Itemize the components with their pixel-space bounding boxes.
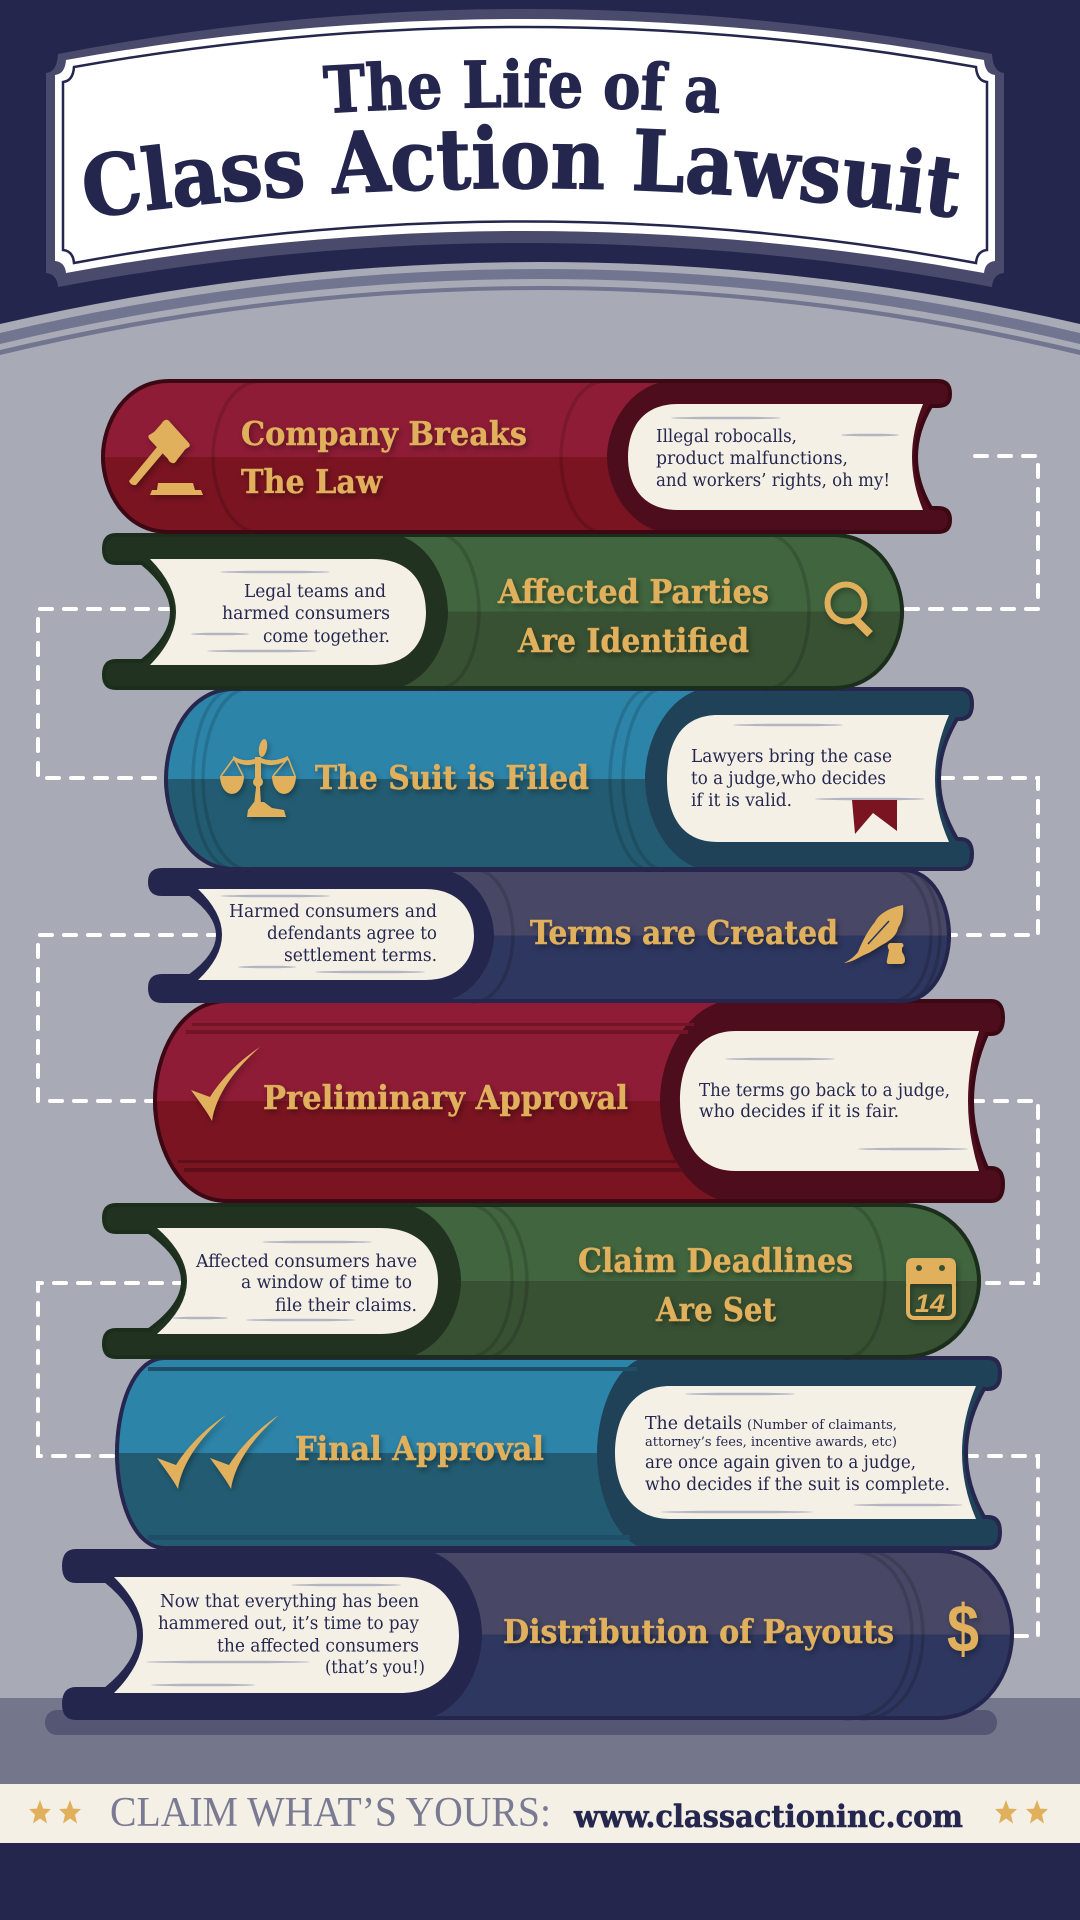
icon: magnifying glass [828,584,870,634]
heading: Final Approval [295,1429,544,1468]
heading: Are Set [655,1290,776,1329]
description: attorney’s fees, incentive awards, etc) [645,1435,897,1450]
grey wall with curved top [0,262,1080,1700]
description: who decides if the suit is complete. [645,1475,950,1495]
cover [104,535,902,688]
footer strip [0,1784,1080,1843]
curved band one [0,269,1080,344]
spine rings [437,534,809,689]
footer background [0,1784,1080,1843]
description [699,1081,950,1122]
description: (Number of claimants, [747,1418,897,1433]
pages [615,1386,976,1519]
outline [103,381,950,532]
cover [166,689,972,869]
pages [667,715,949,842]
book stack shadow [45,1710,997,1735]
book 6: Claim Deadlines Are Set [104,1203,981,1359]
cover [103,381,950,532]
icon: right stars [995,1800,1048,1824]
page scuffs [191,571,330,652]
spine [153,999,740,1203]
book 7: Final Approval [115,1356,1000,1550]
heading: Company Breaks [241,414,527,453]
heading [578,1241,853,1329]
description [222,582,390,647]
banner white plate [55,19,995,273]
description: a window of time to [241,1273,412,1293]
description: who decides if it is fair. [699,1102,899,1122]
cover [150,870,949,1001]
dashed connector path [38,456,1038,1636]
spine rings [193,688,665,870]
description: settlement terms. [284,946,437,966]
spine rings [465,1204,885,1358]
cover [64,1551,1012,1718]
bottom band [0,1843,1080,1920]
page scuffs [671,417,899,436]
spine [430,868,951,1003]
page scuffs [220,895,425,973]
icon: calendar: 14 [915,1290,945,1318]
pages [680,1031,979,1171]
description: Harmed consumers and [229,902,437,922]
description [158,1592,425,1678]
spine [115,1356,654,1550]
cover [104,1205,979,1357]
outline [155,1001,1003,1201]
bookmark [852,800,897,834]
outline [64,1551,1012,1718]
description: file their claims. [275,1296,417,1316]
spine rings [472,869,940,1002]
heading: Preliminary Approval [263,1078,628,1117]
heading: Claim Deadlines [578,1241,853,1280]
banner outer frame [46,9,1004,287]
pages [157,1228,438,1334]
description [691,747,892,811]
outline [166,689,972,869]
description: are once again given to a judge, [645,1453,916,1473]
icon: gavel [129,420,203,495]
cover [155,1001,1003,1201]
pages [114,1577,459,1693]
heading: The Law [241,462,383,501]
description: The terms go back to a judge, [699,1081,950,1101]
cover [117,1358,1000,1548]
book 3: The Suit is Filed [164,687,972,871]
spine [164,687,716,871]
spine stripes lower [178,1160,682,1172]
description: harmed consumers [222,604,390,624]
description: Affected consumers have [195,1252,417,1272]
icon: dollar sign: $ [947,1591,979,1667]
title line one: The Life of a [322,58,720,114]
description: Now that everything has been [160,1592,419,1612]
heading: Terms are Created [530,913,838,952]
spine [413,1549,1014,1720]
description [645,1414,950,1495]
description [656,427,890,491]
icon: calendar [906,1258,956,1318]
description: to a judge,who decides [691,769,886,789]
footer url: www.classactioninc.com [573,1799,963,1835]
description: defendants agree to [267,924,437,944]
outline [104,535,902,688]
icon: check mark [191,1047,260,1121]
banner inner line [63,27,987,263]
heading [241,414,527,501]
pages [198,889,474,980]
page scuffs [733,724,925,800]
book 5: Preliminary Approval [153,999,1003,1203]
outline [150,870,949,1001]
outline [117,1358,1000,1548]
book 8: Distribution of Payouts [64,1549,1014,1720]
spine stripes [148,1367,637,1540]
heading: The Suit is Filed [315,758,589,797]
icon: quill and ink [844,905,905,964]
description: come together. [263,627,390,647]
icon: double check marks [157,1415,279,1489]
spine [101,380,678,534]
description: Legal teams and [244,582,386,602]
book 2: Affected Parties Are Identified [104,533,904,690]
book 1: Company Breaks The Law [101,380,950,534]
spine [382,533,904,690]
description [229,902,437,966]
description: The details [645,1414,742,1434]
description: Lawyers bring the case [691,747,892,767]
title banner [46,9,1004,287]
description: and workers’ rights, oh my! [656,471,890,491]
description: (that’s you!) [325,1658,425,1678]
header background [0,0,1080,400]
spine stripes [186,1023,694,1034]
curved band two [0,286,1080,355]
description: Illegal robocalls, [656,427,797,447]
icon: scales of justice [220,738,296,817]
description: hammered out, it’s time to pay [158,1614,419,1634]
description: the affected consumers [217,1636,419,1656]
spine rings [844,1550,923,1719]
heading: Are Identified [517,621,749,660]
heading: Affected Parties [497,572,769,611]
spine [393,1203,981,1359]
description: product malfunctions, [656,449,848,469]
page scuffs [725,1058,968,1150]
description [195,1252,417,1316]
description: if it is valid. [691,791,792,811]
heading: Distribution of Payouts [503,1612,894,1651]
page scuffs [172,1241,372,1321]
floor [0,1698,1080,1784]
pages [628,404,923,510]
heading [497,572,769,660]
page scuffs [146,1584,401,1686]
icon: left stars [29,1800,81,1824]
outline [104,1205,979,1357]
pages [150,559,426,665]
spine rings [213,381,606,533]
page scuffs [661,1393,963,1513]
title line two, arched: Class Action Lawsuit [84,124,960,218]
footer call to action: CLAIM WHAT’S YOURS: [110,1790,551,1836]
book 4: Terms are Created [150,868,951,1003]
